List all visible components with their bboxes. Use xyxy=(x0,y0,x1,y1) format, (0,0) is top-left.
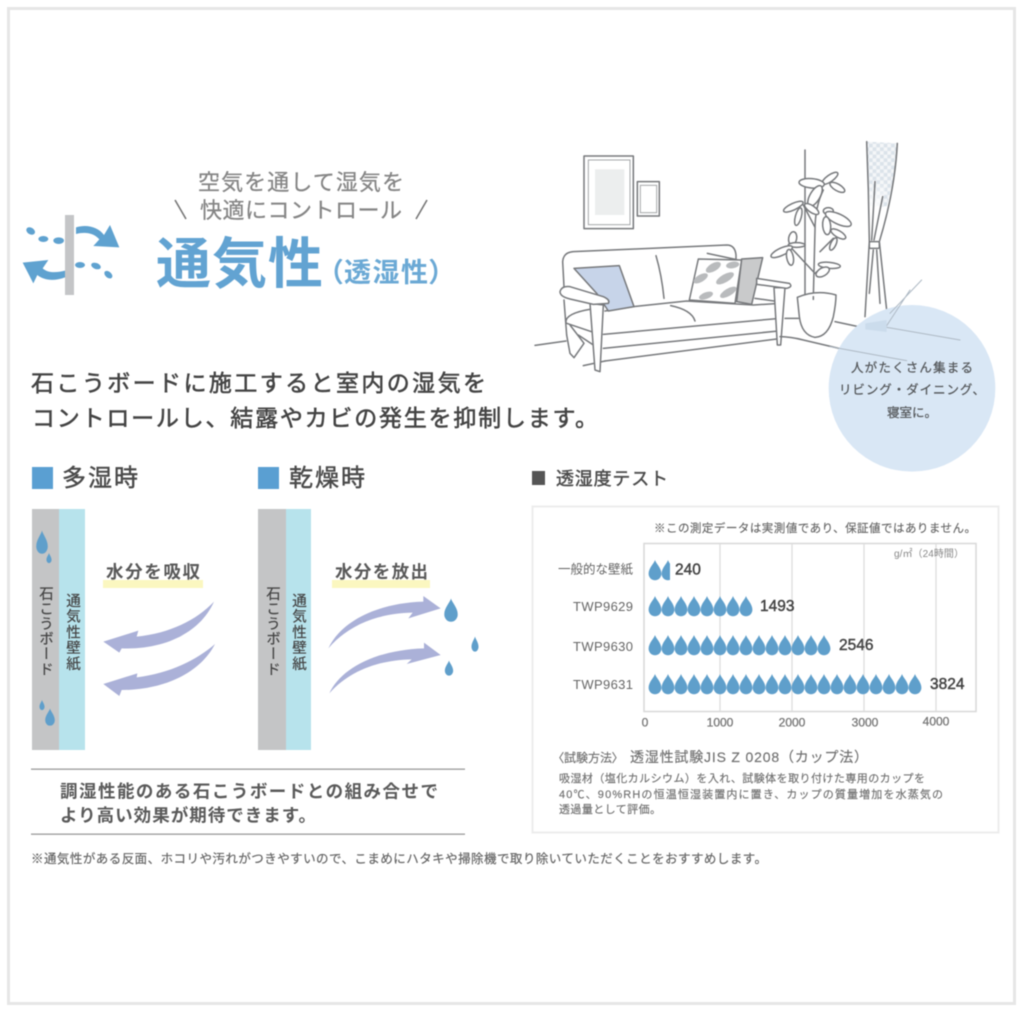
supplementary statement: 調湿性能のある石こうボードとの組み合せで xyxy=(60,782,438,802)
title xyxy=(156,233,443,295)
left arm and legs xyxy=(564,300,593,358)
illustration: sofa xyxy=(535,245,791,372)
x axis labels: 0 xyxy=(642,716,649,730)
test method xyxy=(558,749,943,816)
panel: dry wall section xyxy=(258,509,311,750)
test method: 〈試験方法〉 xyxy=(558,750,618,765)
panel: humid wall section xyxy=(32,509,85,750)
row labels: TWP9630 xyxy=(573,639,633,654)
x axis labels xyxy=(642,714,950,730)
lead text: 石こうボードに施工すると室内の湿気を xyxy=(31,370,486,396)
panel: dry wall section: 通気性壁紙 xyxy=(290,593,306,672)
row labels: 一般的な壁紙 xyxy=(558,562,633,576)
values xyxy=(675,562,965,693)
callout text: リビング・ダイニング、 xyxy=(839,382,985,397)
test method: 透過量として評価。 xyxy=(559,803,661,816)
callout text xyxy=(839,360,985,420)
heading intro text: 快適にコントロール xyxy=(200,198,402,223)
heading intro text xyxy=(175,170,427,223)
arrows: absorb xyxy=(103,602,215,696)
icon: water drops xyxy=(444,598,479,676)
lead text xyxy=(31,370,598,431)
panel: humid wall section: 通気性壁紙 xyxy=(64,593,80,672)
drops row 3824 xyxy=(649,674,921,694)
pillows xyxy=(574,266,634,311)
illustration: picture frames xyxy=(584,156,659,229)
heading: moisture permeability test: 透湿度テスト xyxy=(556,469,668,489)
bar chart xyxy=(558,544,976,730)
row labels xyxy=(558,562,633,692)
drops row 240 xyxy=(649,560,674,580)
callout text: 寝室に。 xyxy=(887,406,937,420)
arrows: release xyxy=(328,596,441,693)
row labels: TWP9631 xyxy=(573,677,633,692)
illustration: potted plant xyxy=(770,142,897,349)
values: 2546 xyxy=(839,637,873,654)
test method: 吸湿材（塩化カルシウム）を入れ、試験体を取り付けた専用のカップを xyxy=(559,771,925,785)
curtain xyxy=(867,142,897,207)
heading intro text: 空気を通して湿気を xyxy=(198,170,404,195)
callout circle xyxy=(829,280,995,472)
drops row 2546 xyxy=(649,635,830,655)
panel: humid wall section: 石こうボード xyxy=(37,586,53,677)
icon: air flow through wall xyxy=(23,215,119,295)
lead text: コントロールし、結露やカビの発生を抑制します。 xyxy=(32,405,598,431)
panel: dry wall section: 石こうボード xyxy=(264,586,280,677)
label: absorb moisture: 水分を吸収 xyxy=(106,562,200,582)
test method: 40℃、90%RHの恒温恒湿装置内に置き、カップの質量増加を水蒸気の xyxy=(559,787,943,801)
test method: 透湿性試験JIS Z 0208（カップ法） xyxy=(630,749,868,765)
x axis labels: 1000 xyxy=(707,716,734,730)
right arm and leg xyxy=(774,288,785,345)
panel heading: high humidity: 多湿時 xyxy=(62,465,138,492)
x axis labels: 3000 xyxy=(852,716,879,730)
supplementary statement xyxy=(31,768,465,835)
supplementary statement: より高い効果が期待できます。 xyxy=(60,806,316,826)
row labels: TWP9629 xyxy=(573,599,633,614)
panel: test chart xyxy=(532,506,998,832)
title: （透湿性） xyxy=(329,258,443,288)
title: 通気性 xyxy=(156,233,323,295)
chart note: ※この測定データは実測値であり、保証値ではありません。 xyxy=(654,521,976,535)
label: release moisture: 水分を放出 xyxy=(335,562,428,582)
footnote: ※通気性がある反面、ホコリや汚れがつきやすいので、こまめにハタキや掃除機で取り除いていただくことをおすすめします。 xyxy=(31,851,767,866)
panel heading: dry: 乾燥時 xyxy=(289,465,365,492)
values: 1493 xyxy=(760,598,794,615)
values: 3824 xyxy=(930,676,965,693)
x axis labels: 2000 xyxy=(779,716,806,730)
bar chart: g/㎡（24時間） xyxy=(894,548,964,560)
values: 240 xyxy=(675,562,701,578)
callout text: 人がたくさん集まる xyxy=(851,360,973,375)
drops row 1493 xyxy=(649,596,752,616)
x axis labels: 4000 xyxy=(923,714,950,728)
